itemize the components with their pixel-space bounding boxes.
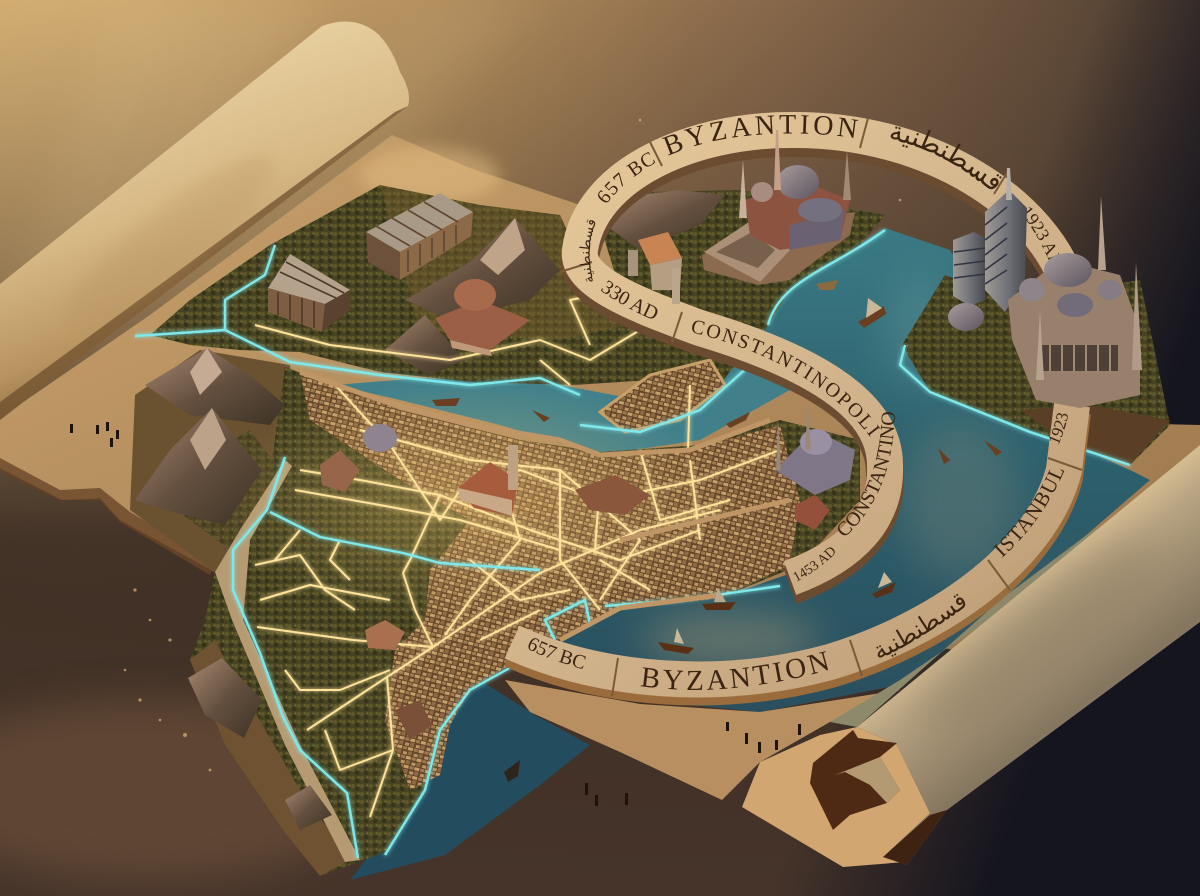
- land: western mountains: [130, 350, 300, 572]
- ribbon: upper S spiral: [560, 118, 1070, 586]
- building: small roman temple: [628, 232, 682, 304]
- building: blue mosque right: [1008, 196, 1142, 408]
- people on parchment: [70, 422, 801, 806]
- ribbon label: 1453 AD: 1453 AD: [794, 547, 835, 582]
- land: hagia sophia shore: [600, 190, 885, 330]
- ribbon label: 657 BC top: 657 BC: [598, 152, 656, 202]
- building: greek temple north: [366, 193, 473, 280]
- ribbon label: Arabic small left: قسطنطنية: [579, 220, 596, 282]
- parchment under ribbon: [505, 525, 1100, 800]
- ribbon label: Istanbul: ISTANBUL: [993, 469, 1064, 558]
- building: hagia sophia: [702, 130, 855, 285]
- ribbon label: 1923 AD top: 1923 AD: [1026, 207, 1060, 260]
- land: asian shore: [902, 275, 1170, 465]
- building: modern towers: [948, 168, 1027, 331]
- ribbon label: 330 AD: 330 AD: [600, 280, 658, 318]
- building: domed temple: [435, 279, 530, 356]
- road network: [255, 290, 780, 817]
- building: greek temple west: [268, 254, 350, 332]
- ribbon: lower arc: [512, 405, 1082, 696]
- ribbon label: Arabic bottom: قسطنطنية: [876, 594, 966, 658]
- parchment sheet: [0, 135, 1200, 660]
- left scroll roll: [0, 22, 409, 420]
- building: small mosque in old city: [775, 400, 855, 495]
- walls along golden horn: [300, 372, 790, 640]
- land: old city peninsula: [190, 367, 860, 876]
- rivers and coast glow: [135, 230, 1130, 858]
- ribbon label: Byzantion top: BYZANTION: [662, 115, 858, 156]
- ribbon label: 1923: 1923: [1050, 413, 1068, 444]
- ribbon label: 657 BC bottom: 657 BC: [528, 638, 586, 669]
- land: fort island: [600, 360, 725, 432]
- land: northern shore: [150, 185, 745, 385]
- building: central basilica: [458, 445, 518, 516]
- mountains: [135, 190, 725, 830]
- ribbon label: Constantinopoli lower: CONSTANTINO: [838, 412, 895, 536]
- ribbon label: Byzantion bottom: BYZANTION: [640, 651, 828, 690]
- ribbon label: Arabic top: قسطنطنية: [890, 126, 1002, 190]
- sparkling dust: [124, 119, 901, 771]
- ships: [432, 280, 1002, 782]
- building: city palaces: [320, 424, 830, 740]
- right scroll roll: [857, 445, 1200, 865]
- scroll curled hole: [810, 730, 900, 830]
- water: bosphorus and golden horn: [335, 228, 1150, 880]
- scroll torn parchment end: [742, 727, 930, 867]
- ribbon label: Constantinopoli upper: CONSTANTINOPOLI: [692, 320, 880, 437]
